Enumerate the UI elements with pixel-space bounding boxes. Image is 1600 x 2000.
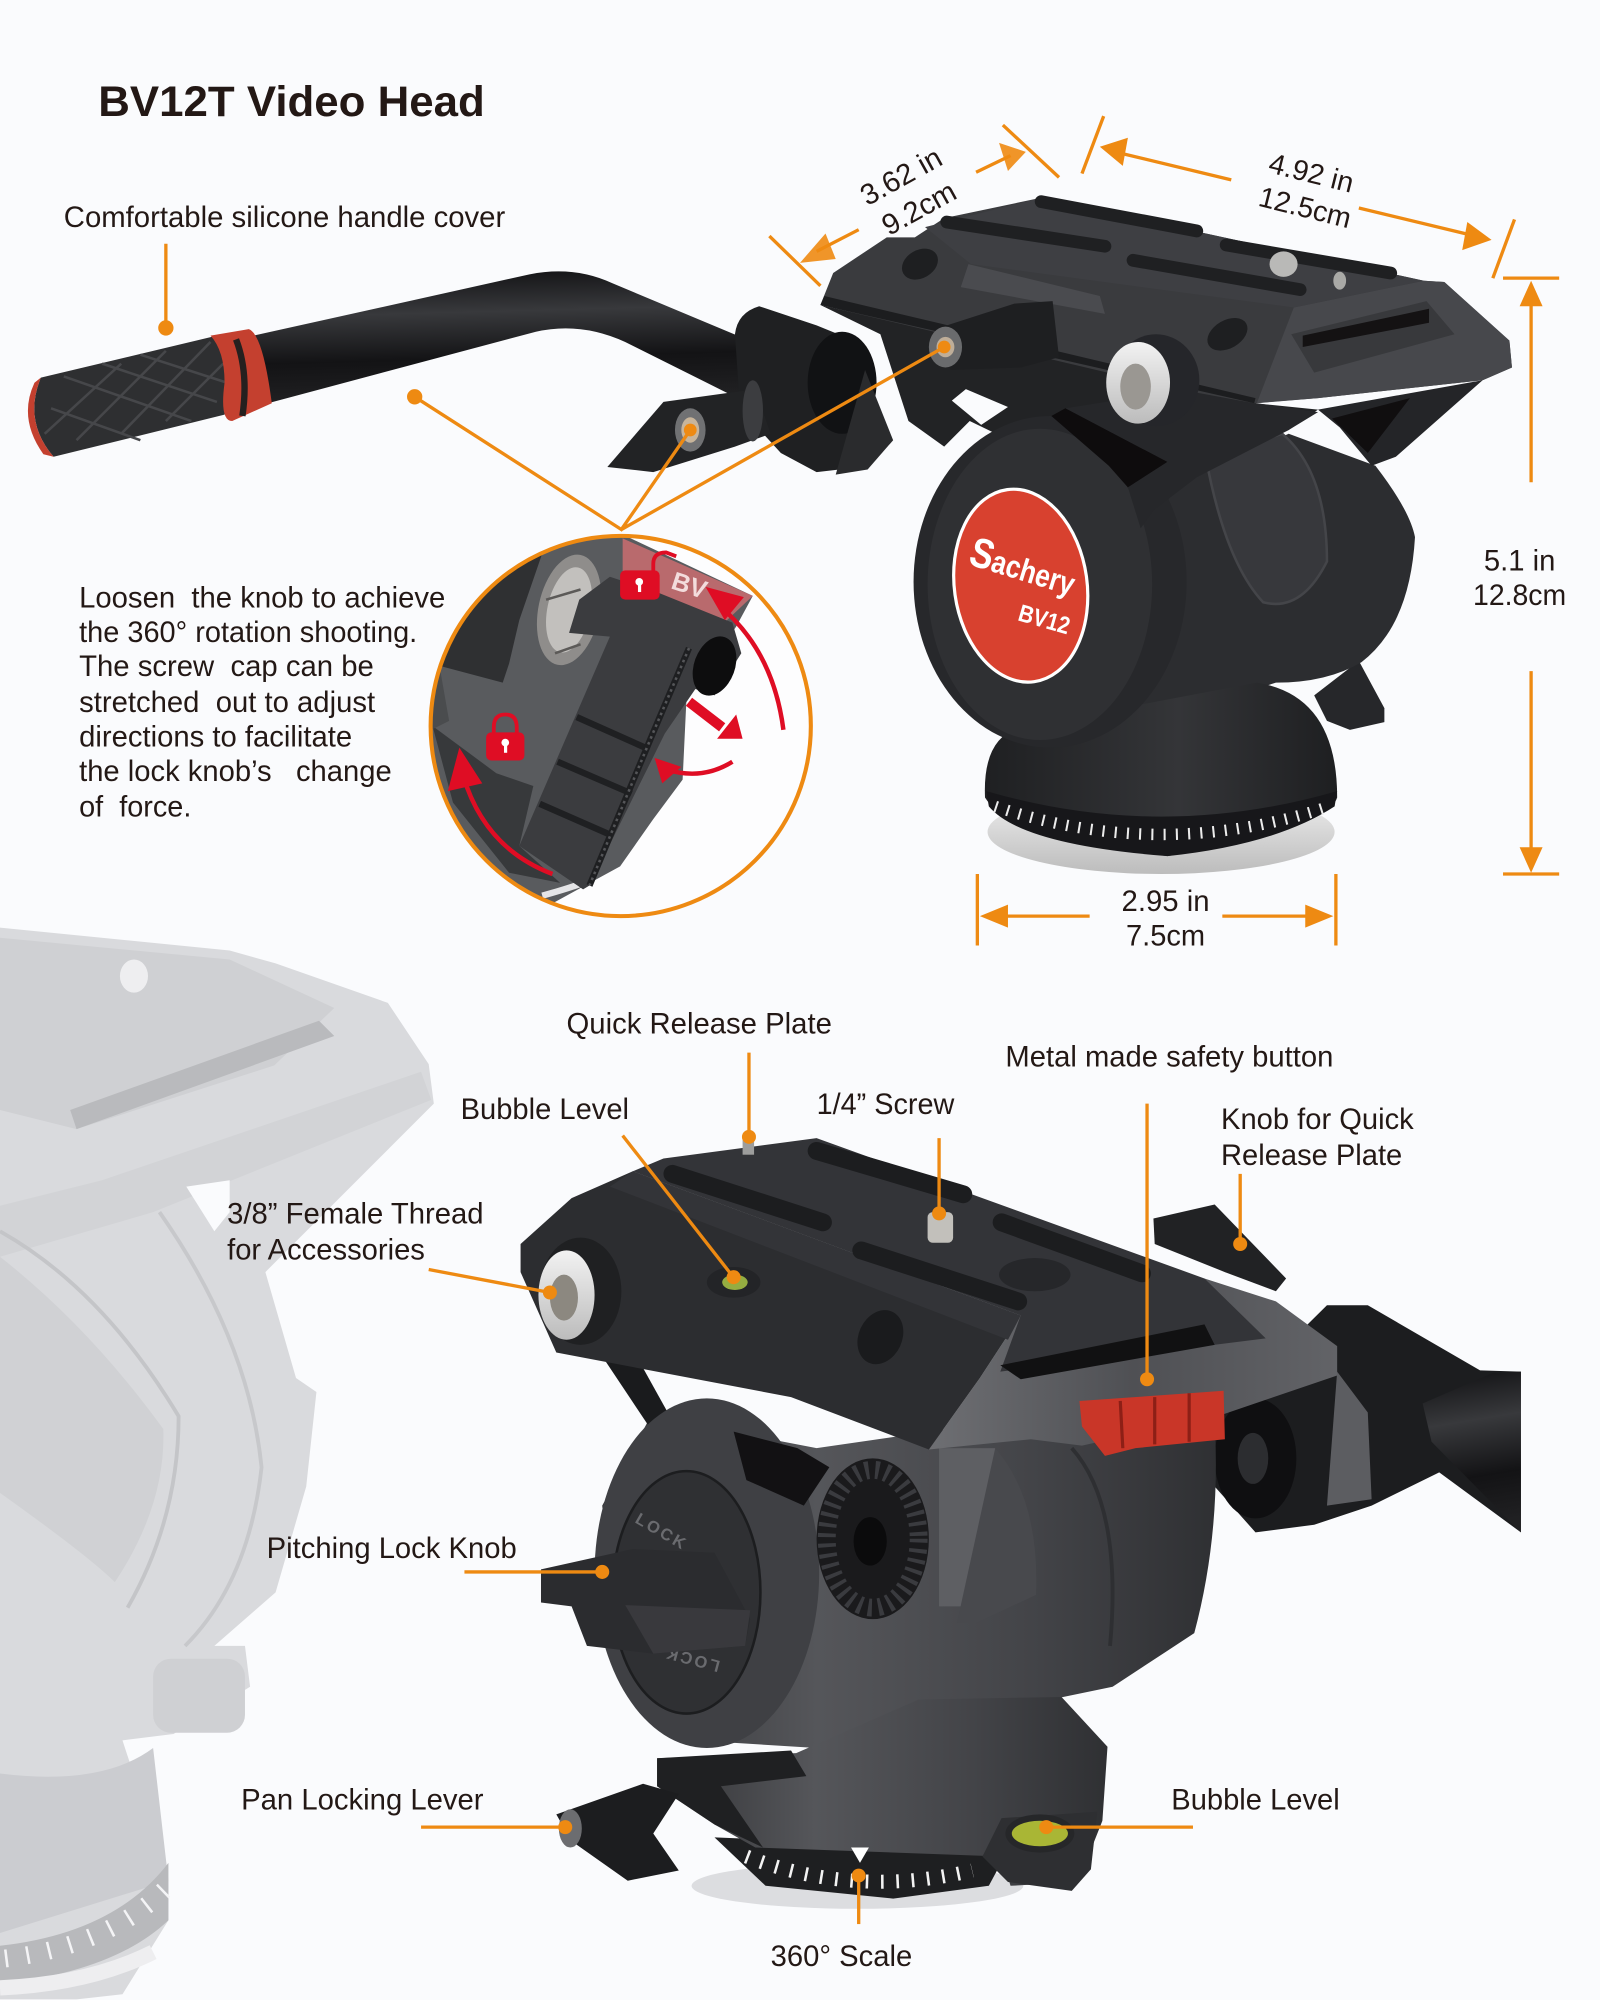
pitching lock knob <box>541 1549 750 1654</box>
handle grip <box>28 329 272 457</box>
right clamp and handle bar <box>1215 1305 1521 1532</box>
knob description text: directions to facilitate <box>79 720 352 753</box>
dimension: 5.1 in height: 5.1 in <box>1484 544 1555 577</box>
label: quick release plate: Quick Release Plate <box>567 1007 832 1040</box>
knob description text: the 360° rotation shooting. <box>79 616 417 649</box>
label: safety button: Metal made safety button <box>1005 1041 1333 1074</box>
lower degree scale <box>715 1837 1008 1899</box>
knob description text <box>79 581 445 824</box>
screw <box>928 1212 953 1243</box>
3/8 thread ring <box>538 1238 621 1345</box>
silver foot <box>988 790 1335 874</box>
folding lever <box>519 577 741 889</box>
knob description text: The screw cap can be <box>79 650 374 683</box>
plate slot <box>1291 301 1455 373</box>
rear body <box>1046 434 1415 746</box>
top product: video head with pan handle <box>28 198 1512 874</box>
dimension: 3.62 in depth <box>769 125 1059 286</box>
label: knob for quick release plate: Knob for Quick <box>1221 1103 1415 1136</box>
knob description text: of force. <box>79 791 191 824</box>
label: 3/8 female thread: for Accessories <box>227 1233 425 1266</box>
base dome <box>657 1697 1107 1886</box>
pan handle bar <box>242 271 753 403</box>
strut <box>600 1347 670 1429</box>
dimension: 4.92 in width: 12.5cm <box>1255 181 1354 235</box>
dimension: 4.92 in width: 4.92 in <box>1266 148 1357 200</box>
label: knob for quick release plate <box>1221 1103 1415 1251</box>
dimension: 2.95 in base <box>977 874 1336 952</box>
rear knob <box>1153 1204 1286 1291</box>
label: pan locking lever <box>241 1783 572 1834</box>
label: bubble level top: Bubble Level <box>461 1093 629 1126</box>
lower rails <box>672 1151 1142 1301</box>
red safety button <box>1079 1391 1225 1456</box>
frame under plate <box>820 305 1318 510</box>
lock disc: LOCK <box>662 1643 722 1676</box>
label: quick release plate <box>567 1007 832 1144</box>
side disc <box>914 416 1187 748</box>
base rim <box>657 1751 806 1848</box>
title: BV12T Video Head <box>98 78 485 126</box>
front side of plate <box>521 1171 1021 1449</box>
lower body <box>602 1391 1216 1748</box>
label: handle cover: Comfortable silicone handle cover <box>64 201 505 234</box>
red Sachery badge <box>942 480 1100 691</box>
label: knob for quick release plate: Release Plate <box>1221 1139 1402 1172</box>
rear arm <box>1318 380 1483 466</box>
label: 360 scale <box>771 1869 912 1973</box>
side disc <box>595 1398 819 1748</box>
gear knob <box>817 1458 929 1619</box>
label: bubble level base <box>1039 1783 1340 1834</box>
dimension: 3.62 in depth: 9.2cm <box>876 175 962 242</box>
faded ghost product image <box>0 928 434 1999</box>
label: 3/8 female thread: 3/8” Female Thread <box>227 1198 484 1231</box>
base <box>985 683 1337 856</box>
arm crossing disc <box>1051 408 1167 487</box>
label: bubble level base: Bubble Level <box>1171 1783 1340 1816</box>
rotation arrows <box>463 606 783 874</box>
thread ring <box>1113 334 1199 426</box>
label: safety button <box>1005 1041 1333 1386</box>
pan locking lever <box>556 1784 679 1881</box>
lock disc <box>612 1471 760 1714</box>
label: pitching lock knob <box>267 1532 609 1579</box>
red BV12 sticker <box>622 538 753 620</box>
knob description text: the lock knob’s change <box>79 755 392 788</box>
degree scale <box>986 791 1337 856</box>
dimension: 2.95 in base: 2.95 in <box>1122 885 1210 918</box>
dimension: 5.1 in height: 12.8cm <box>1473 579 1566 612</box>
silver frame <box>929 1278 1337 1449</box>
label: 1/4 screw <box>817 1088 955 1220</box>
knob description text: stretched out to adjust <box>79 686 376 719</box>
scale pointer <box>851 1848 869 1863</box>
dimension: 3.62 in depth: 3.62 in <box>855 141 948 212</box>
knob description text: Loosen the knob to achieve <box>79 581 445 614</box>
clamp <box>735 306 880 472</box>
scale foot <box>692 1863 1023 1909</box>
dimension: 4.92 in width <box>1082 116 1515 278</box>
bubble level on base <box>982 1812 1097 1891</box>
lock disc: LOCK <box>632 1509 691 1554</box>
rear knob <box>1314 661 1384 730</box>
label: pitching lock knob: Pitching Lock Knob <box>267 1532 517 1565</box>
top plate surface <box>633 1138 1266 1372</box>
unlocked padlock icon <box>620 552 676 600</box>
label: 360 scale: 360° Scale <box>771 1940 912 1973</box>
top plate block <box>820 198 1512 403</box>
label: 3/8 female thread <box>227 1198 557 1300</box>
red Sachery badge: BV12 <box>1015 600 1073 640</box>
label: pan locking lever: Pan Locking Lever <box>241 1783 484 1816</box>
silver bolt <box>536 554 600 666</box>
cut-out recess <box>734 1432 829 1506</box>
side bolt <box>935 301 1059 370</box>
locked padlock icon <box>486 715 524 760</box>
label: handle cover <box>64 201 505 336</box>
dimension: 5.1 in height <box>1473 278 1566 874</box>
label: bubble level top <box>461 1093 741 1284</box>
lever knob <box>607 389 771 472</box>
inset circle: knob close-up <box>408 533 811 916</box>
top bubble level <box>707 1267 760 1298</box>
inset body background <box>408 533 753 903</box>
lower product: video head front view <box>521 1136 1521 1909</box>
inset circle: knob close-up: BV <box>668 567 710 605</box>
plate rails <box>947 202 1391 290</box>
callout lines to knob inset <box>407 341 951 530</box>
dimension: 2.95 in base: 7.5cm <box>1126 919 1205 952</box>
pin <box>743 1136 754 1155</box>
red Sachery badge: Sachery <box>965 528 1082 604</box>
label: 1/4 screw: 1/4” Screw <box>817 1088 955 1121</box>
